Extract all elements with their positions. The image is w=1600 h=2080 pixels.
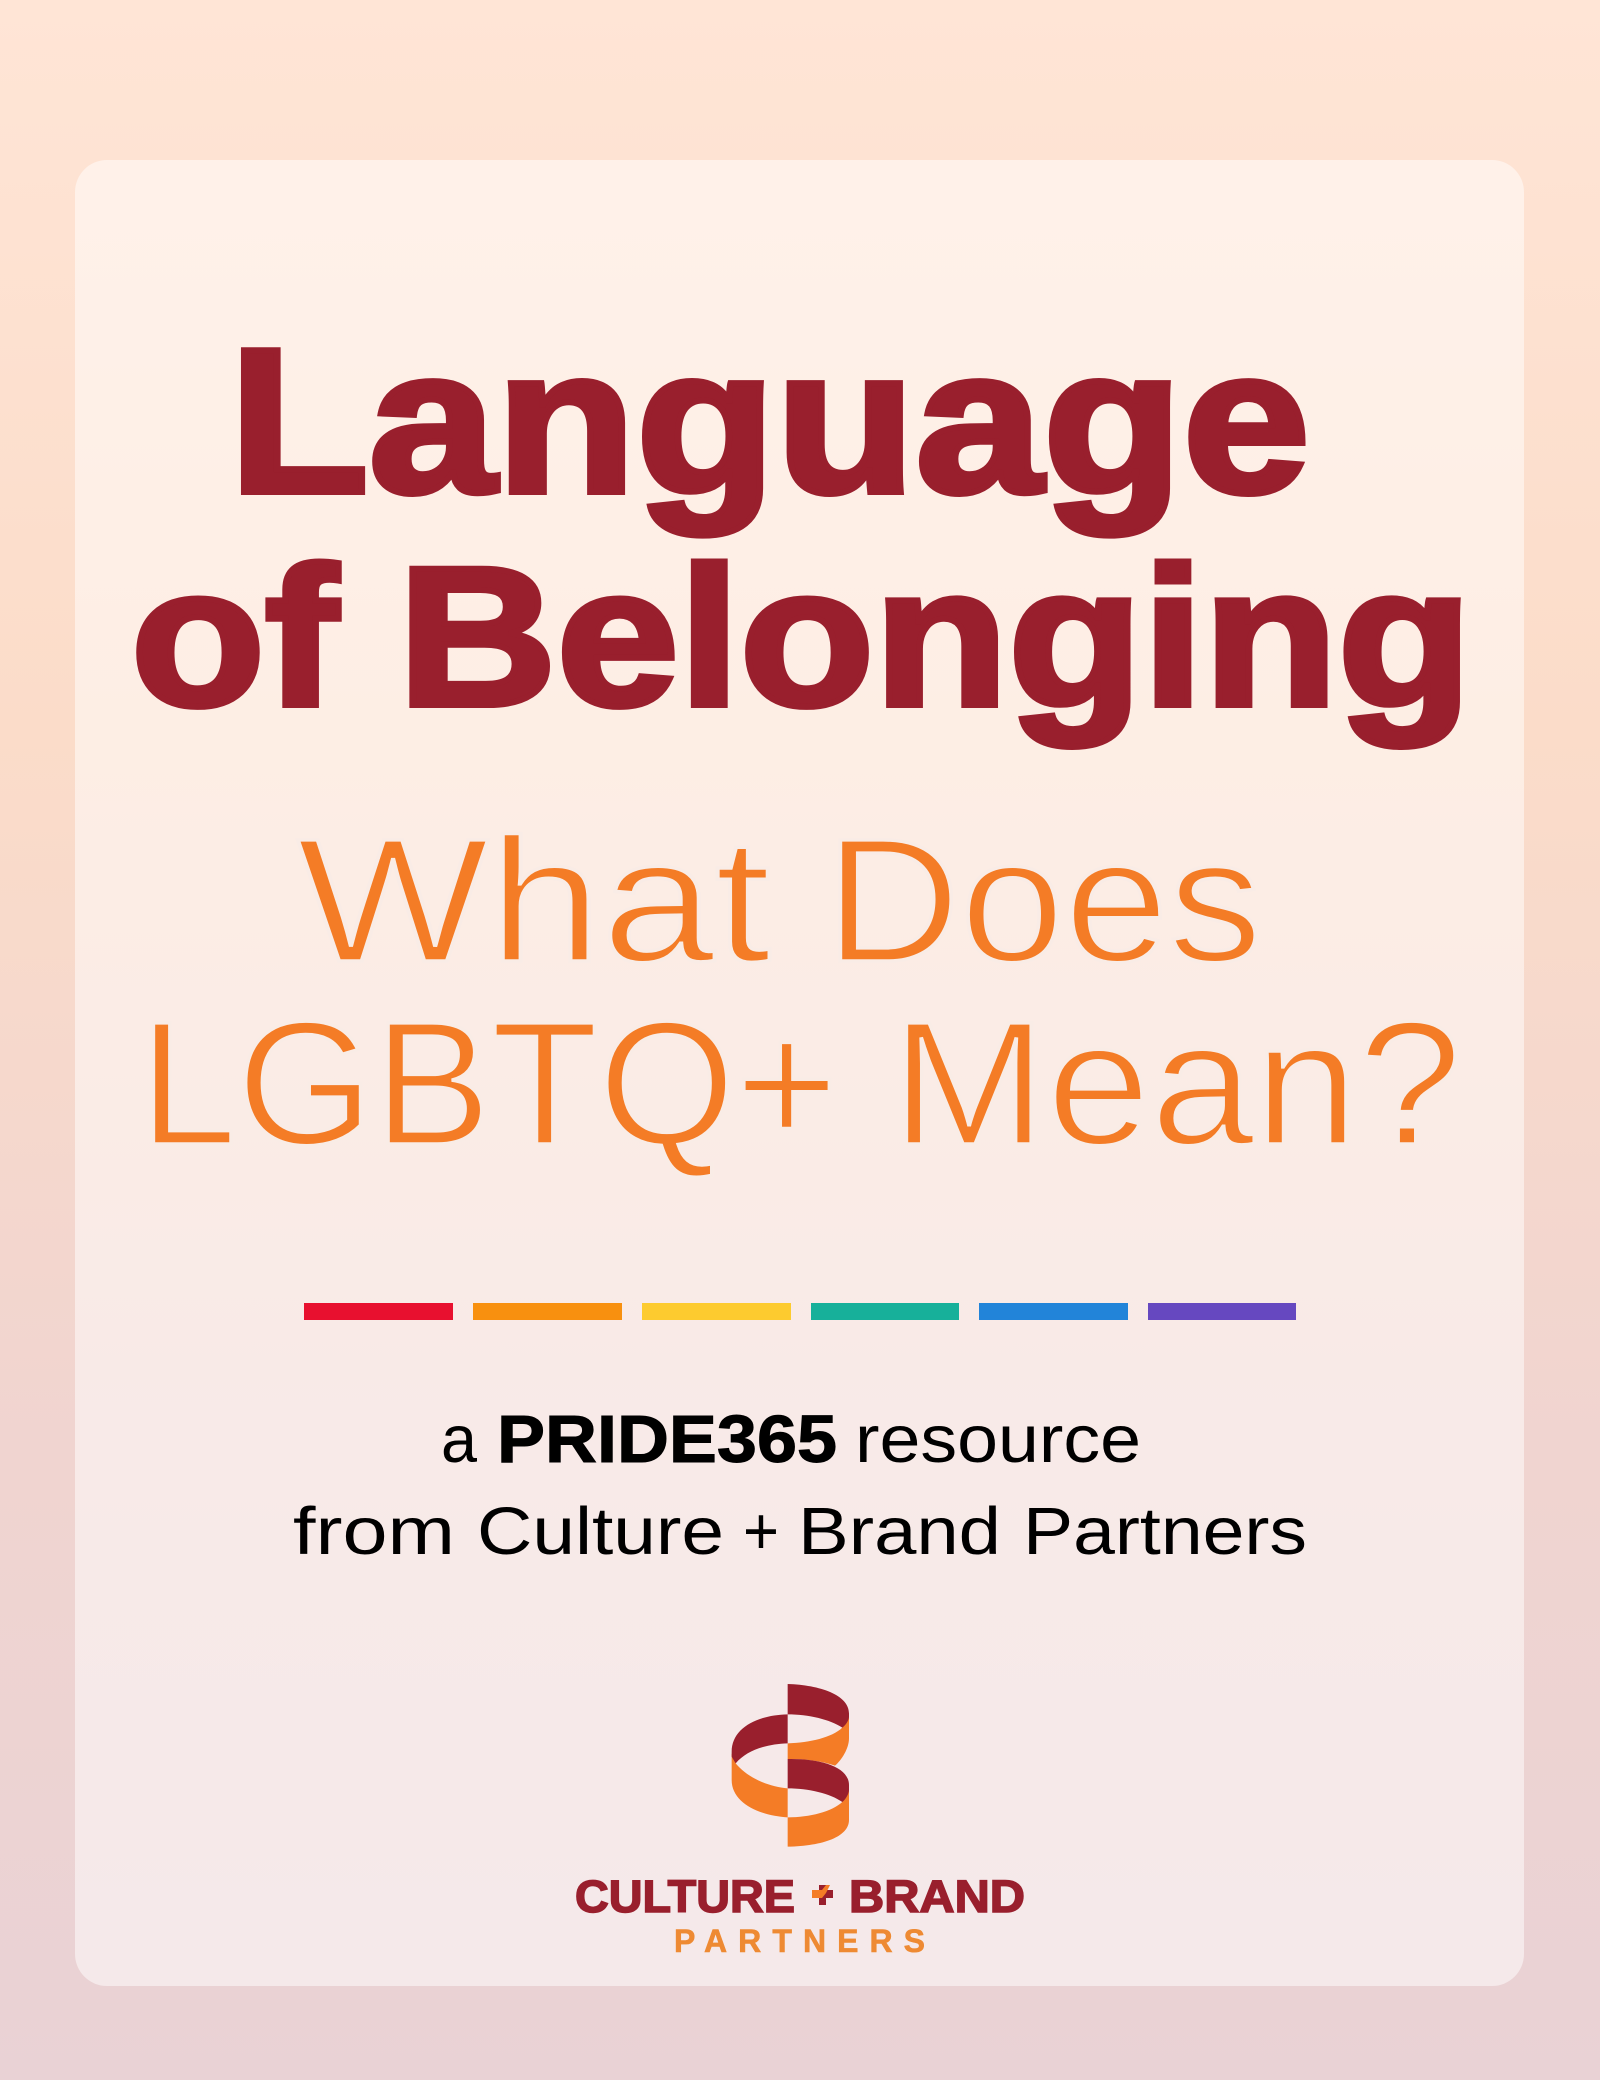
logo wordmark: CULTURE [575, 1871, 795, 1922]
icon: ribbon spiral [732, 1684, 849, 1847]
subtitle: What Does LGBTQ+ Mean?: LGBTQ+ [139, 986, 838, 1182]
text block: resource attribution: Culture [477, 1494, 724, 1569]
title: Language of Belonging [131, 306, 1472, 747]
logo wordmark [575, 1871, 1025, 1959]
logo wordmark: BRAND [849, 1871, 1025, 1922]
panel: main card [75, 160, 1524, 1986]
subtitle: What Does LGBTQ+ Mean?: Does [825, 803, 1262, 999]
text block: resource attribution: PRIDE365 [497, 1402, 837, 1477]
text block: resource attribution: Brand [798, 1494, 1001, 1569]
subtitle: What Does LGBTQ+ Mean?: What [297, 803, 771, 999]
subtitle: What Does LGBTQ+ Mean?: Mean? [891, 986, 1462, 1182]
title: Language of Belonging: Belonging [398, 526, 1472, 747]
title: Language of Belonging: of [131, 526, 339, 747]
text block: resource attribution [293, 1402, 1307, 1569]
subtitle: What Does LGBTQ+ Mean? [139, 803, 1462, 1182]
text block: resource attribution: resource [855, 1402, 1141, 1477]
text block: resource attribution: a [441, 1402, 478, 1477]
rainbow divider [304, 1303, 1296, 1320]
logo: Culture + Brand Partners [575, 1684, 1025, 1959]
text block: resource attribution: from [293, 1494, 455, 1569]
text block: resource attribution: + [743, 1494, 779, 1569]
text block: resource attribution: Partners [1023, 1494, 1307, 1569]
logo wordmark: PARTNERS [674, 1923, 925, 1959]
title: Language of Belonging: Language [229, 306, 1310, 536]
